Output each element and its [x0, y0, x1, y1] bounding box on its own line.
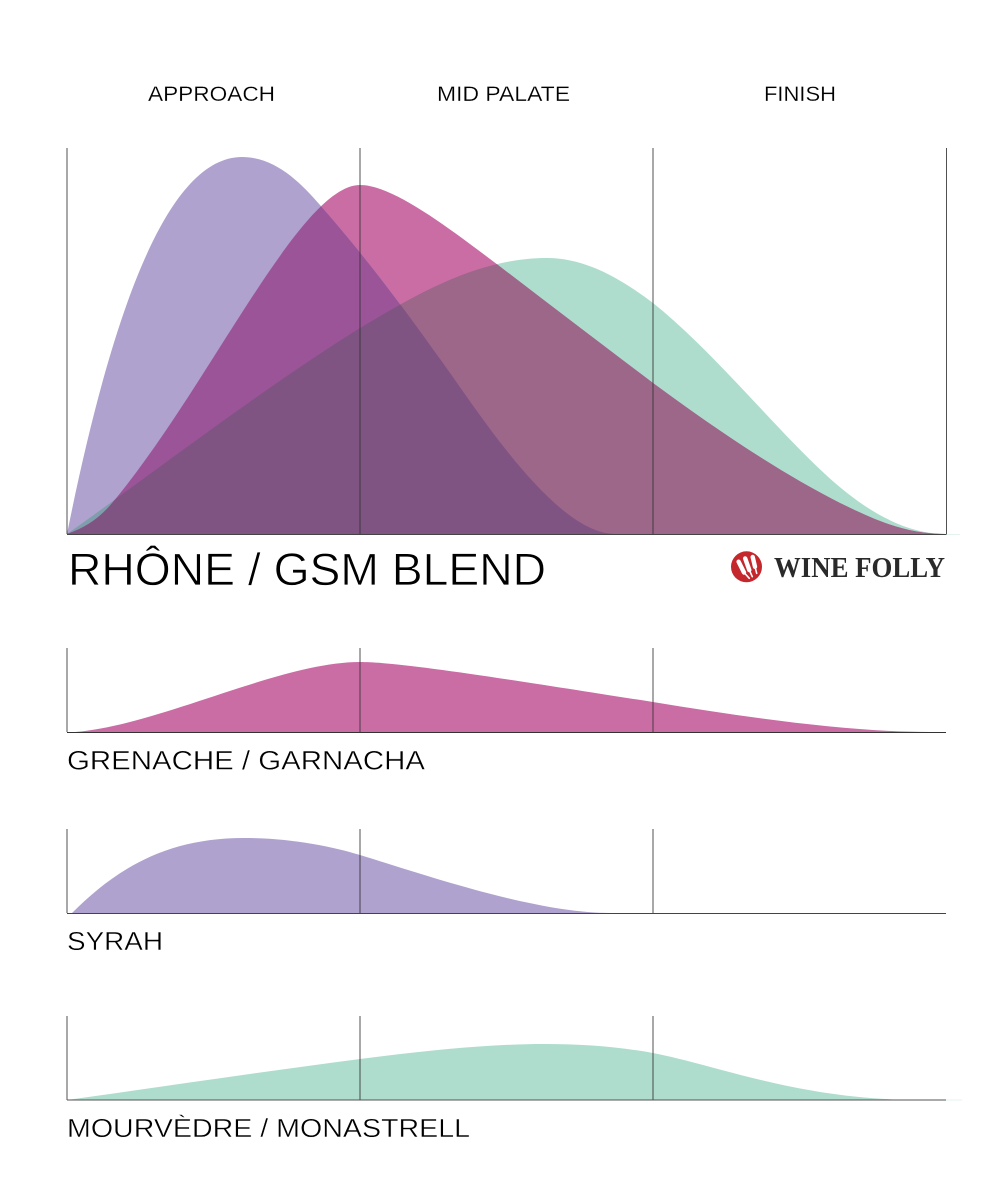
label: grenache: GRENACHE / GARNACHA: [67, 746, 425, 776]
column heading: mid palate: MID PALATE: [437, 83, 570, 106]
overlap: all three grapes: [68, 304, 612, 534]
column heading: finish: FINISH: [764, 83, 836, 106]
area: syrah profile: [72, 838, 610, 913]
overlap: grenache and mourvèdre: [75, 264, 942, 534]
wordmark: WINE FOLLY: [774, 553, 945, 584]
chart: blended GSM taste profile: [60, 148, 960, 540]
label: syrah: SYRAH: [67, 926, 163, 956]
chart: grenache: [67, 648, 946, 732]
axes: mourvèdre: [67, 1016, 962, 1100]
axes: syrah: [67, 829, 946, 914]
logo: wine folly: [731, 551, 945, 584]
label: mourvèdre: MOURVÈDRE / MONASTRELL: [67, 1113, 470, 1143]
icon: red circle with bottles: [731, 551, 762, 582]
axes: grenache: [67, 648, 946, 732]
area: mourvèdre: [67, 258, 946, 534]
chart: syrah: [67, 829, 946, 914]
chart: mourvèdre: [67, 1016, 962, 1100]
overlap: syrah and grenache: [68, 206, 400, 534]
area: mourvèdre profile: [67, 1044, 920, 1100]
overlap: syrah and mourvèdre: [68, 500, 115, 534]
axes: main chart: [67, 148, 960, 534]
column heading: approach: APPROACH: [148, 83, 275, 106]
area: grenache profile: [75, 662, 930, 732]
area: syrah: [67, 157, 615, 534]
area: grenache: [67, 185, 946, 534]
title: RHÔNE / GSM BLEND: [68, 544, 546, 595]
